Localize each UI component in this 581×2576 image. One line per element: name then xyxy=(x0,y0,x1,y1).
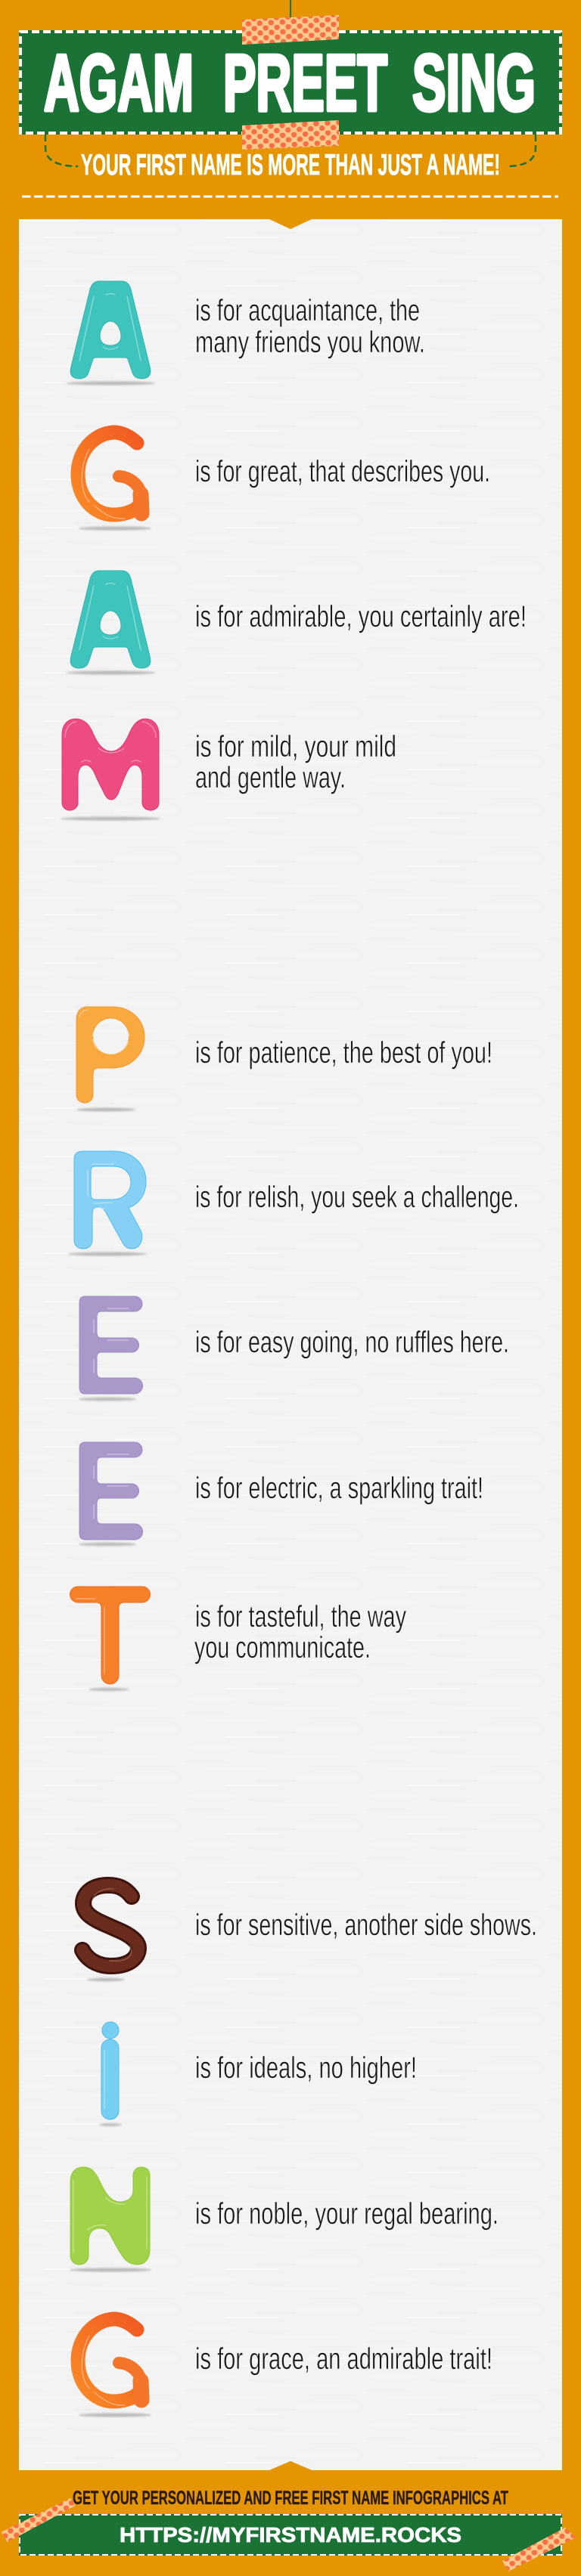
title: PREET xyxy=(223,39,387,128)
tape: left xyxy=(2,2498,76,2542)
row: R relish xyxy=(68,1151,519,1256)
row: A admirable xyxy=(66,571,527,674)
title xyxy=(44,39,536,128)
hanging string xyxy=(290,0,291,18)
icon: letter R xyxy=(68,1151,147,1256)
icon: letter A xyxy=(66,281,155,385)
text: and gentle way. xyxy=(195,761,346,794)
text: is for tasteful, the way xyxy=(195,1600,406,1633)
row: E easy going xyxy=(79,1296,509,1401)
icon: letter G xyxy=(78,2319,151,2417)
text: is for ideals, no higher! xyxy=(195,2051,417,2085)
connector: left xyxy=(45,135,78,166)
icon: letter P xyxy=(76,1007,144,1111)
icon: letter i xyxy=(99,2022,122,2126)
icon: letter A xyxy=(66,571,155,674)
title banner xyxy=(19,30,562,135)
icon: letter M xyxy=(61,719,160,821)
footer xyxy=(2,2488,576,2571)
url banner xyxy=(19,2514,562,2556)
row: S sensitive xyxy=(82,1885,537,1981)
row: I ideals xyxy=(99,2022,417,2126)
icon: letter E xyxy=(79,1296,142,1401)
row: T tasteful xyxy=(70,1587,406,1691)
text: is for acquaintance, the xyxy=(195,294,420,327)
text: many friends you know. xyxy=(195,326,425,359)
tape: bottom of banner xyxy=(242,120,339,150)
text: is for mild, your mild xyxy=(195,730,396,763)
row: G great xyxy=(78,432,490,531)
header xyxy=(19,0,562,181)
icon: letter E xyxy=(79,1442,142,1547)
url: HTTPS://MYFIRSTNAME.ROCKS xyxy=(120,2523,461,2547)
row: G grace xyxy=(78,2319,492,2417)
connector: right xyxy=(506,135,536,166)
icon: letter S xyxy=(82,1885,138,1981)
text: you communicate. xyxy=(194,1631,371,1664)
row: A acquaintance xyxy=(66,281,425,385)
title: AGAM xyxy=(44,39,194,128)
row: N noble xyxy=(70,2167,499,2272)
tape: top xyxy=(242,15,339,45)
row: E electric xyxy=(79,1442,483,1547)
row: P patience xyxy=(76,1007,492,1111)
tape: right xyxy=(502,2528,576,2571)
icon: letter T xyxy=(70,1587,150,1691)
icon: letter G xyxy=(78,432,151,531)
row: M mild xyxy=(61,719,396,821)
icon: letter N xyxy=(70,2167,151,2272)
